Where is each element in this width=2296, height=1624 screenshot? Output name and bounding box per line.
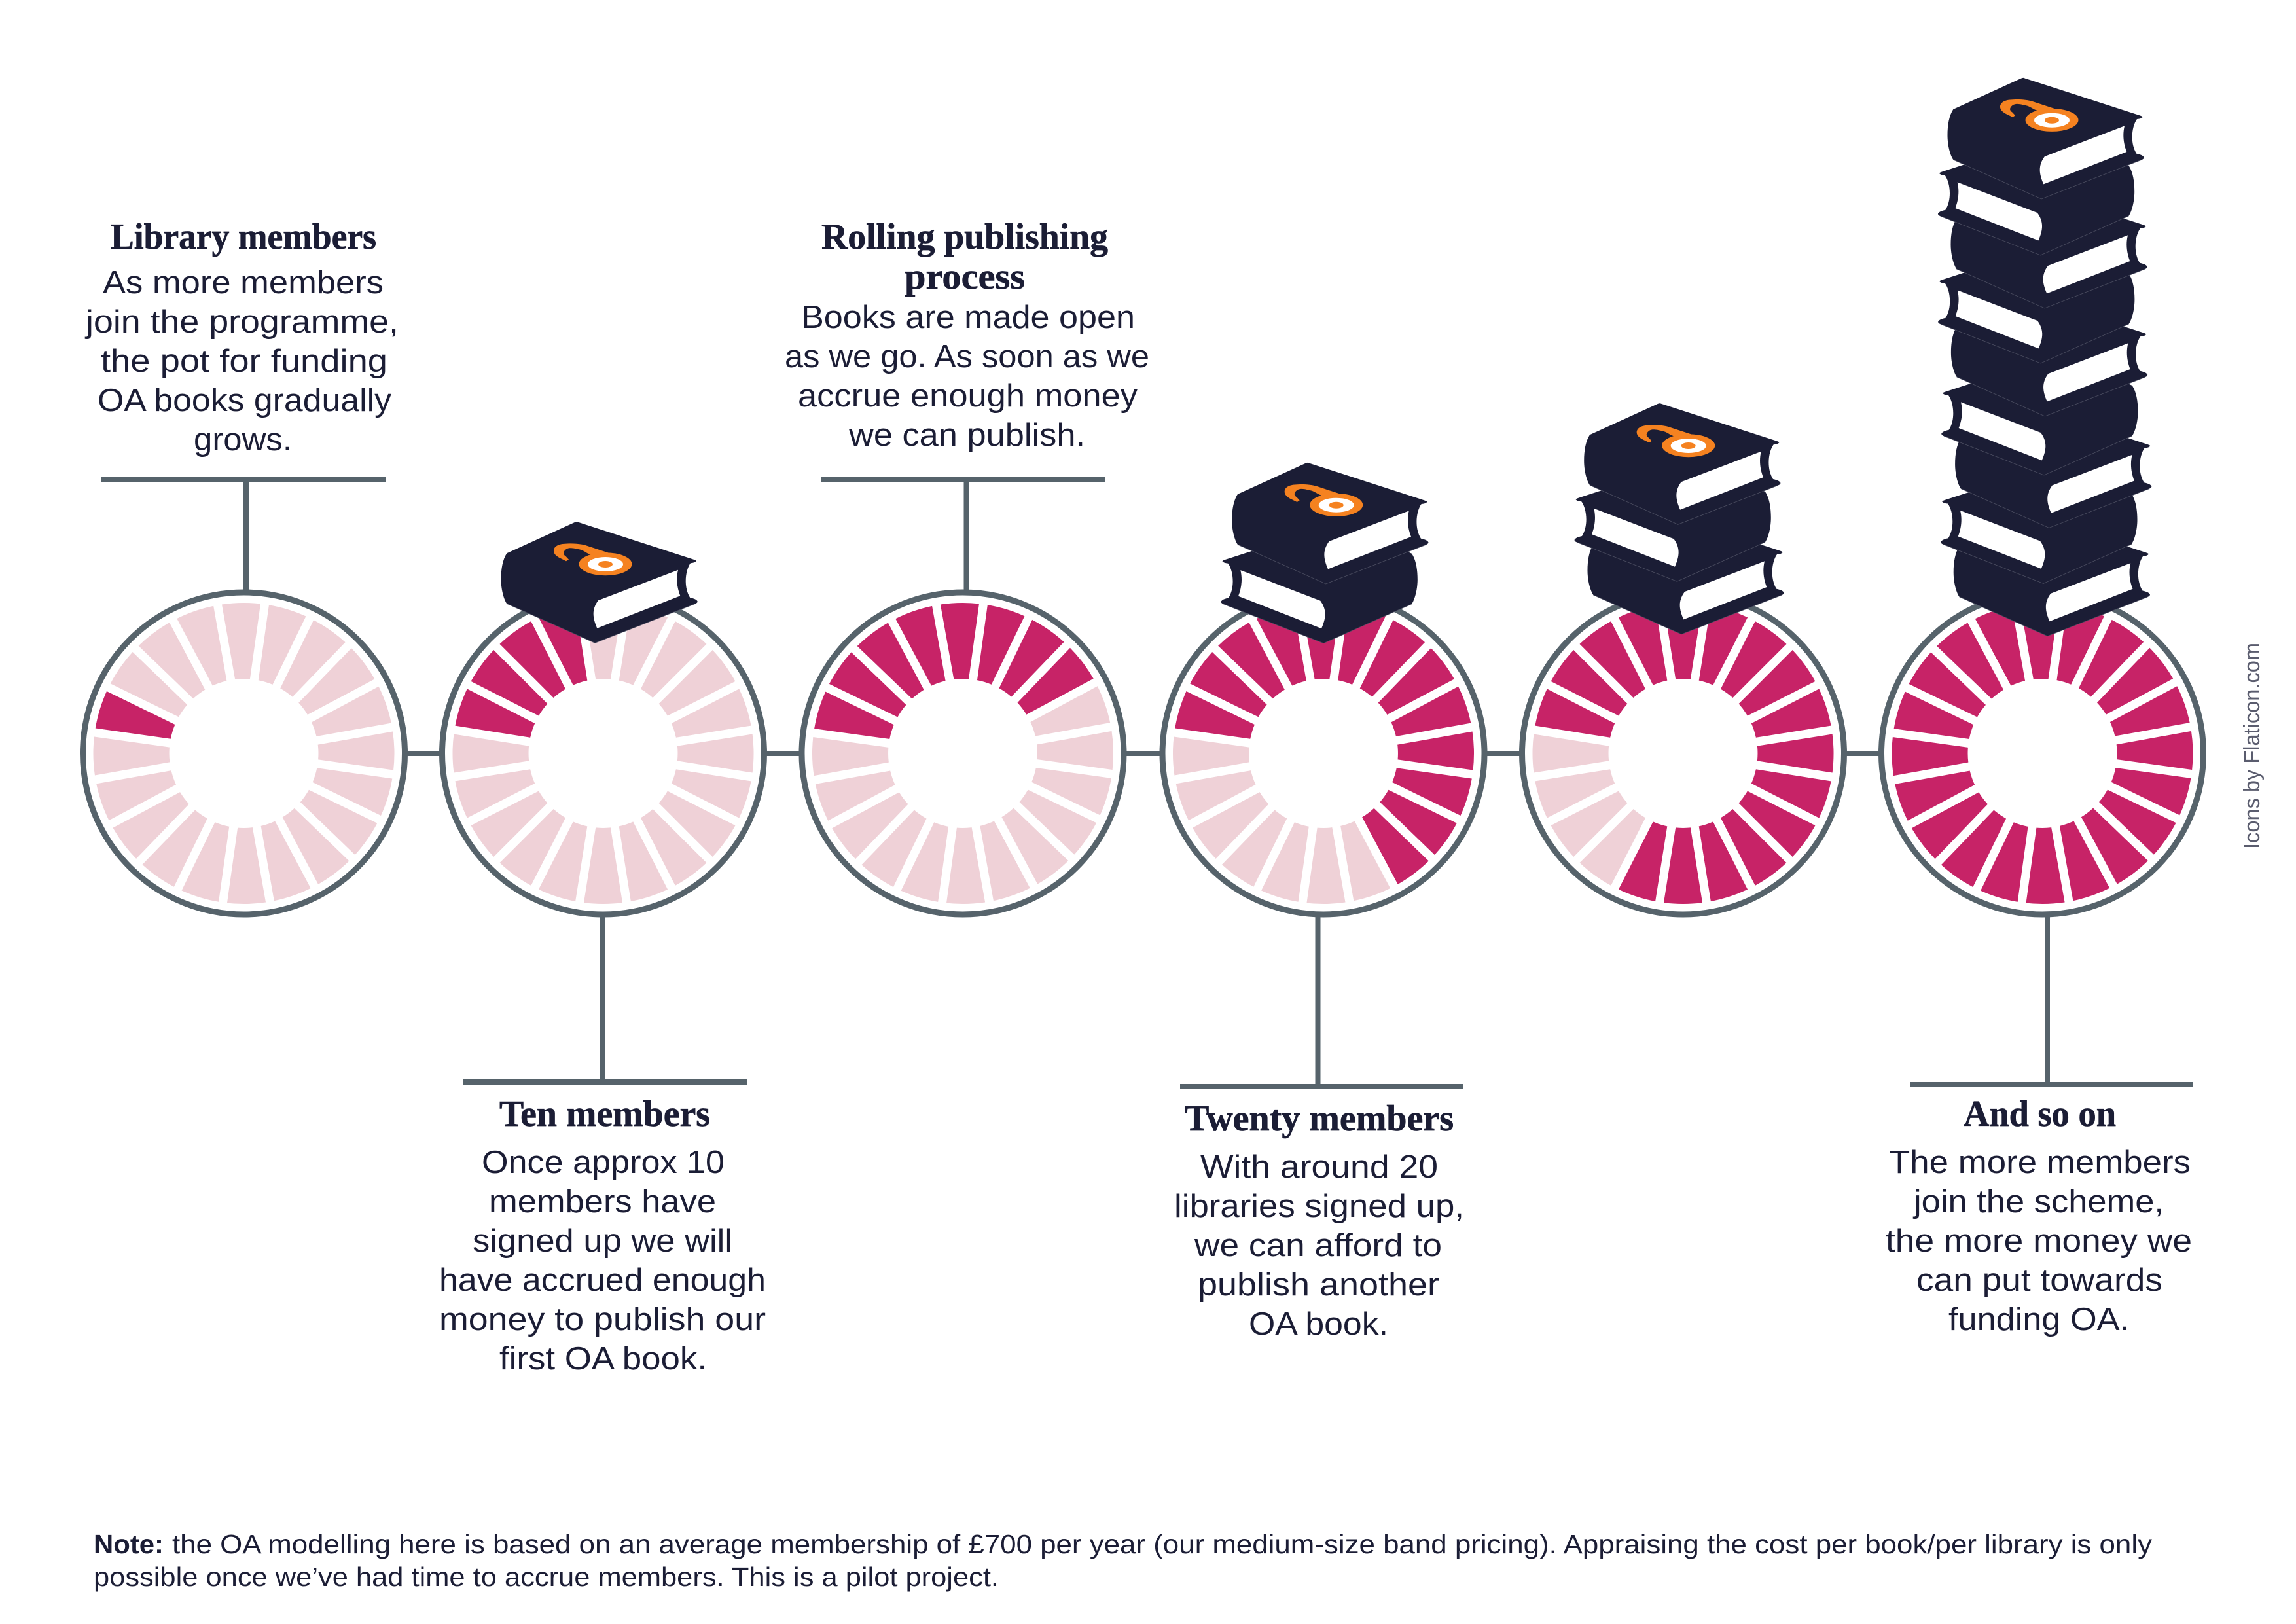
text block: twenty members description: we can afford to: [1194, 1228, 1442, 1263]
donut 4: thirteen segments funded: [1162, 592, 1484, 914]
text block: rolling publishing description: as we go. As soon as we: [785, 339, 1149, 374]
donut 6: all segments funded: [1881, 592, 2203, 914]
text block: library members description: As more members: [103, 265, 384, 300]
credit: icons by flaticon: Icons by Flaticon.com: [2240, 643, 2265, 849]
bracket: ten members: [463, 917, 747, 1082]
text block: and so on description: [1886, 1145, 2192, 1337]
text block: ten members description: first OA book.: [499, 1341, 707, 1377]
text block: ten members description: signed up we will: [473, 1223, 732, 1259]
text block: twenty members description: libraries signed up,: [1174, 1189, 1464, 1224]
text block: library members description: OA books gradually: [98, 383, 392, 418]
text block: rolling publishing description: Books are made open: [801, 300, 1135, 335]
bracket: rolling publishing: [821, 479, 1105, 590]
icon: one open access book: [501, 522, 698, 643]
donut 1: one of twenty segments funded: [82, 592, 404, 914]
footnote: [94, 1529, 2153, 1592]
heading: rolling publishing process: Rolling publishing: [821, 217, 1108, 257]
donut 2: four segments funded: [442, 592, 764, 914]
donut 3: eight segments funded: [802, 592, 1124, 914]
footnote: Note:: [94, 1529, 164, 1559]
text block: and so on description: The more members: [1889, 1145, 2191, 1180]
text block: rolling publishing description: [785, 300, 1149, 453]
heading: twenty members: Twenty members: [1185, 1098, 1454, 1139]
panel: and so on caption: [1886, 1094, 2192, 1337]
heading: library members: Library members: [111, 217, 376, 257]
text block: and so on description: the more money we: [1886, 1223, 2192, 1259]
heading: ten members: Ten members: [499, 1094, 710, 1134]
timeline connector: [243, 751, 2042, 756]
text block: ten members description: members have: [489, 1184, 716, 1219]
text block: ten members description: have accrued enough: [439, 1263, 766, 1298]
text block: library members description: [84, 265, 399, 458]
text block: twenty members description: publish another: [1198, 1267, 1439, 1303]
footnote: the OA modelling here is based on an average membership of £700 per year (our medium-size band pricing). Appraising the cost per book/per library is only: [172, 1529, 2153, 1559]
donut 5: sixteen segments funded: [1522, 592, 1844, 914]
heading: rolling publishing process: [821, 217, 1108, 297]
text block: and so on description: funding OA.: [1948, 1302, 2129, 1337]
text block: and so on description: join the scheme,: [1912, 1184, 2164, 1219]
heading: rolling publishing process: process: [905, 257, 1025, 297]
panel: twenty members caption: [1174, 1098, 1464, 1342]
bracket: and so on: [1910, 917, 2193, 1085]
panel: rolling publishing process caption: [785, 217, 1149, 453]
text block: ten members description: [439, 1145, 766, 1377]
text block: library members description: the pot for funding: [101, 344, 387, 379]
text block: rolling publishing description: accrue enough money: [798, 378, 1138, 414]
icon: stack of two books: [1221, 463, 1428, 643]
text block: rolling publishing description: we can publish.: [848, 418, 1085, 453]
footnote: possible once we’ve had time to accrue members. This is a pilot project.: [94, 1562, 999, 1592]
panel: ten members caption: [439, 1094, 766, 1377]
text block: twenty members description: With around 20: [1200, 1149, 1438, 1185]
text block: twenty members description: [1174, 1149, 1464, 1342]
text block: ten members description: money to publish our: [439, 1302, 766, 1337]
panel: library members caption: [84, 217, 399, 458]
bracket: library members: [101, 479, 386, 590]
icon: stack of three books: [1575, 403, 1784, 634]
icon: stack of nine books: [1938, 78, 2151, 636]
bracket: twenty members: [1180, 917, 1463, 1087]
text block: library members description: grows.: [194, 422, 292, 458]
text block: ten members description: Once approx 10: [482, 1145, 725, 1180]
text block: and so on description: can put towards: [1916, 1263, 2162, 1298]
heading: and so on: And so on: [1964, 1094, 2116, 1134]
text block: library members description: join the programme,: [84, 304, 399, 340]
text block: twenty members description: OA book.: [1249, 1307, 1388, 1342]
